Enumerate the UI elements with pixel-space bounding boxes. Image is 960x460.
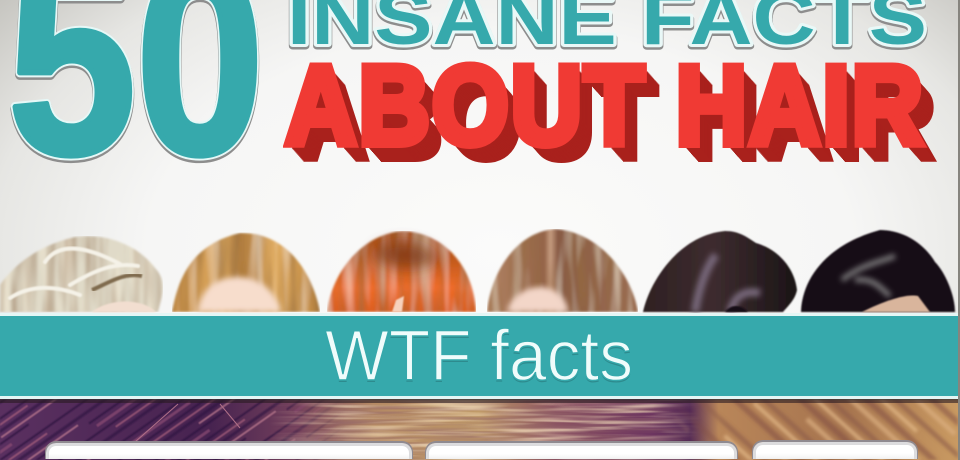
hair: black — [801, 230, 955, 312]
hair: platinum blonde — [0, 236, 163, 312]
hair photo background strip — [0, 399, 958, 460]
card 1 — [46, 443, 412, 459]
card 2 — [426, 443, 737, 459]
banner heading: WTF facts — [325, 317, 633, 396]
hair: copper red — [327, 231, 476, 312]
hair: honey blonde — [172, 233, 320, 312]
row of six hair models — [0, 228, 956, 313]
hair: dark brown — [643, 231, 797, 312]
right page edge — [958, 0, 960, 460]
hair strand texture — [0, 398, 958, 460]
card 3 — [753, 442, 917, 459]
hair: light brown — [487, 229, 638, 312]
title line ABOUT HAIR: ABOUT HAIR — [285, 43, 925, 168]
banner heading: WTF facts — [325, 319, 633, 398]
teal section banner — [0, 313, 958, 399]
